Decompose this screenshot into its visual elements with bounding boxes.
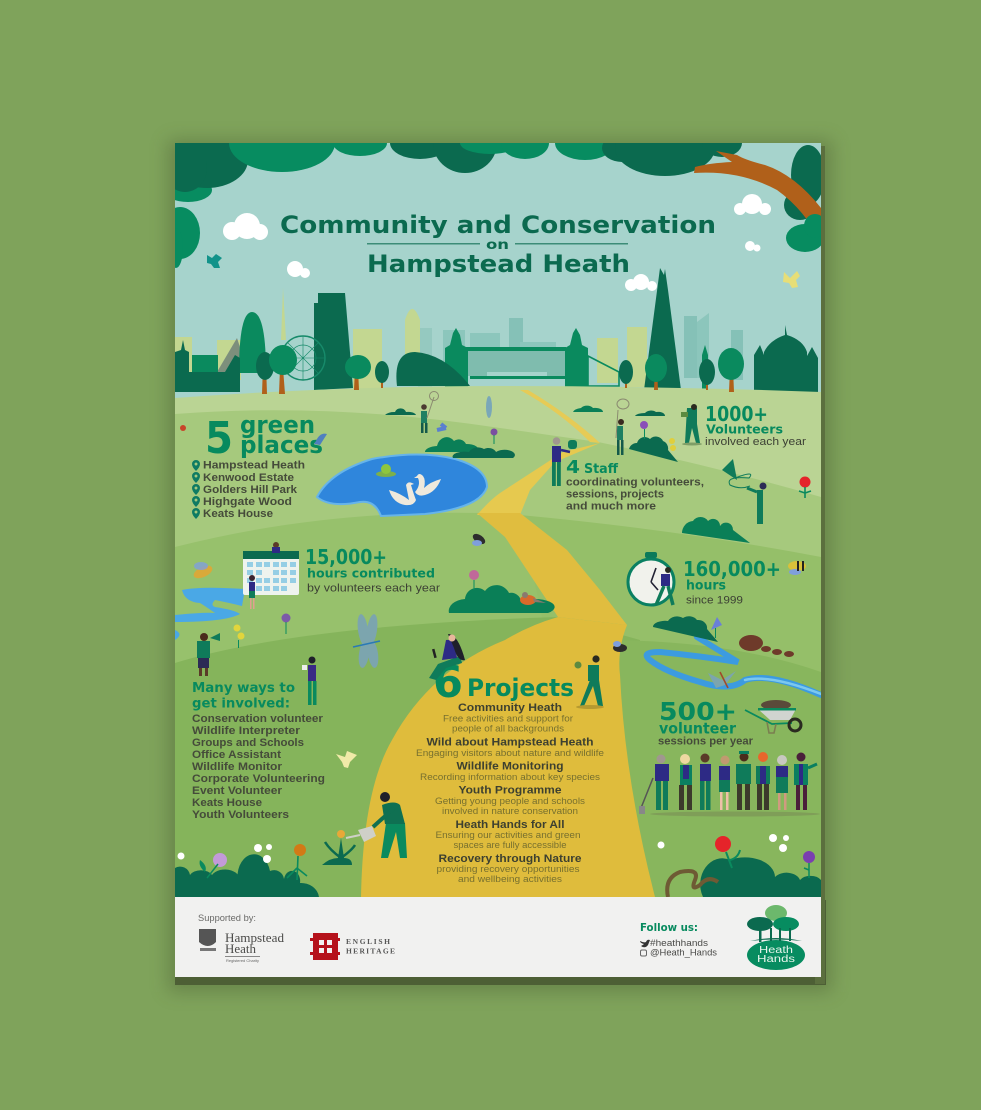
1000+ volunteers: Volunteers <box>706 422 783 436</box>
follow us: Follow us: <box>640 921 698 934</box>
project list: providing recovery opportunities <box>436 864 580 874</box>
location pins <box>192 460 200 519</box>
logo: Heath Hands <box>747 905 805 970</box>
500+ volunteer sessions: volunteer <box>659 720 737 738</box>
volunteer 7 <box>776 755 788 810</box>
many ways to get involved: Groups and Schools <box>192 737 304 749</box>
project list <box>416 702 604 884</box>
top foliage <box>229 143 742 176</box>
logo: city crest <box>199 929 216 951</box>
lightest hill <box>175 386 821 497</box>
project list: involved in nature conservation <box>442 806 578 816</box>
project list: Ensuring our activities and green <box>436 830 580 840</box>
500+ volunteer sessions: 500+ <box>659 697 737 726</box>
frog <box>376 464 396 477</box>
wheelbarrow <box>745 700 801 733</box>
logo: English Heritage: ENGLISH <box>346 937 390 946</box>
15,000+ hours: by volunteers each year <box>307 582 440 594</box>
places list: Kenwood Estate <box>203 472 294 484</box>
title: Hampstead Heath <box>367 250 630 278</box>
1000+ volunteers <box>705 402 806 448</box>
left foliage <box>175 143 248 268</box>
staff member with watering can <box>552 437 577 486</box>
volunteer 2 <box>679 754 692 810</box>
many ways to get involved: Wildlife Interpreter <box>192 725 301 737</box>
project list: spaces are fully accessible <box>454 840 566 850</box>
foreground bush, flowers and snake right <box>658 834 821 897</box>
4 staff: sessions, projects <box>566 488 664 500</box>
walking person with plant <box>574 655 604 709</box>
logo: English Heritage: HERITAGE <box>346 946 395 956</box>
figure with megaphone <box>197 633 220 676</box>
volunteer 1 <box>639 754 669 814</box>
project list: Recovery through Nature <box>438 853 582 865</box>
calendar illustration <box>243 542 299 609</box>
volunteer with plant <box>681 404 702 446</box>
places list: Keats House <box>203 508 273 520</box>
follow us <box>640 921 718 958</box>
right river <box>647 637 821 695</box>
child flying kite and red flower <box>722 459 811 524</box>
footer panel <box>175 897 821 977</box>
1000+ volunteers: 1000+ <box>705 402 768 426</box>
5 green places: green <box>240 411 315 439</box>
places list: Highgate Wood <box>203 496 292 508</box>
6 projects: 6 <box>433 657 463 708</box>
many ways to get involved: Keats House <box>192 797 262 809</box>
5 green places: places <box>240 431 323 459</box>
4 staff: Staff <box>584 462 618 477</box>
project list: Heath Hands for All <box>456 819 564 831</box>
follow us: #heathhands <box>650 938 709 948</box>
project list: Wild about Hampstead Heath <box>426 736 594 748</box>
logo: Hampstead Heath <box>225 930 285 963</box>
volunteer 5 <box>736 751 751 810</box>
icon: kingfisher <box>314 434 327 445</box>
logo: English Heritage <box>310 933 395 960</box>
hill bands <box>175 410 821 900</box>
right foliage and branch <box>694 145 826 252</box>
5 green places: 5 <box>205 413 233 464</box>
project list: Getting young people and schools <box>435 796 586 806</box>
15,000+ hours <box>305 545 440 594</box>
4 staff: 4 <box>566 457 580 478</box>
volunteer 8 <box>794 752 817 810</box>
places list: Golders Hill Park <box>203 484 298 496</box>
160,000+ hours <box>685 560 780 604</box>
many ways to get involved: Many ways to <box>192 681 295 696</box>
logo: Hampstead Heath: Heath <box>225 941 256 956</box>
sky <box>175 143 821 403</box>
many ways to get involved: Conservation volunteer <box>192 713 324 725</box>
6 projects <box>416 657 604 884</box>
logo: Heath Hands: Hands <box>757 954 795 965</box>
project list: Wildlife Monitoring <box>456 760 564 772</box>
places list: Hampstead Heath <box>203 460 305 472</box>
city skyline <box>175 268 818 392</box>
poster <box>160 113 826 977</box>
many ways to get involved: Corporate Volunteering <box>192 773 325 785</box>
bees <box>192 532 806 652</box>
gardener with watering can <box>322 792 407 865</box>
15,000+ hours: 15,000+ <box>305 545 387 569</box>
1000+ volunteers: involved each year <box>705 436 806 448</box>
follow us: @Heath_Hands <box>650 948 718 958</box>
6 projects: Projects <box>467 674 574 702</box>
15,000+ hours: hours contributed <box>307 566 435 580</box>
many ways to get involved: Wildlife Monitor <box>192 761 283 773</box>
volunteer 4 <box>719 756 730 810</box>
many ways to get involved: get involved: <box>192 696 290 712</box>
160,000+ hours: 160,000+ <box>683 557 781 581</box>
clouds <box>223 194 771 291</box>
4 staff: coordinating volunteers, <box>566 476 704 488</box>
butterflies in the sky <box>207 254 800 288</box>
project list: Youth Programme <box>458 784 562 796</box>
500+ volunteer sessions: sessions per year <box>658 736 754 748</box>
stopwatch with runner <box>628 552 674 605</box>
dragonflies <box>353 613 736 688</box>
places list <box>203 460 305 520</box>
title: on <box>486 238 509 253</box>
logo: Hampstead Heath: Registered Charity <box>226 958 259 963</box>
project list: Free activities and support for <box>443 714 573 724</box>
many ways to get involved <box>192 681 325 821</box>
title <box>280 211 716 278</box>
logo: Heath Hands: Heath <box>759 945 793 956</box>
pond with swans and frog <box>317 454 487 516</box>
small trees along the horizon <box>256 345 744 394</box>
left river <box>175 588 245 622</box>
many ways to get involved: Office Assistant <box>192 749 281 761</box>
supported by: Supported by: <box>198 913 256 924</box>
person on laptop sitting on 6 <box>429 634 465 680</box>
winding yellow path <box>361 390 655 897</box>
project list: people of all backgrounds <box>452 724 565 734</box>
dragonfly large <box>353 613 380 669</box>
160,000+ hours: since 1999 <box>686 594 743 606</box>
title: Community and Conservation <box>280 211 716 239</box>
butterfly <box>336 751 357 768</box>
bushes <box>385 406 750 642</box>
project list: Engaging visitors about nature and wildlife <box>416 748 604 758</box>
many ways to get involved: Event Volunteer <box>192 785 283 797</box>
volunteer 3 <box>700 754 711 810</box>
foreground bushes and flowers left <box>175 844 319 897</box>
reader with tablet <box>302 656 316 705</box>
500+ volunteer sessions <box>658 697 754 748</box>
project list: and wellbeing activities <box>458 874 563 884</box>
project list: Community Heath <box>458 702 562 714</box>
team of volunteers <box>639 751 820 816</box>
project list: Recording information about key species <box>420 772 601 782</box>
many ways to get involved: Youth Volunteers <box>192 809 289 821</box>
5 green places <box>192 411 327 520</box>
swans <box>389 474 441 505</box>
tree canopy <box>175 143 821 268</box>
poster shadow <box>168 140 832 992</box>
logo: Hampstead Heath: Hampstead <box>225 930 285 945</box>
hedgehog and babies <box>739 635 794 657</box>
4 staff: and much more <box>566 500 656 512</box>
illustration: net wielders, flowers and insects on the top hill <box>180 392 676 455</box>
volunteer 6 <box>756 752 770 810</box>
4 staff <box>566 460 704 510</box>
dragonfly small <box>708 671 736 688</box>
160,000+ hours: hours <box>686 578 726 594</box>
flowers and robin mid hill <box>234 570 722 648</box>
